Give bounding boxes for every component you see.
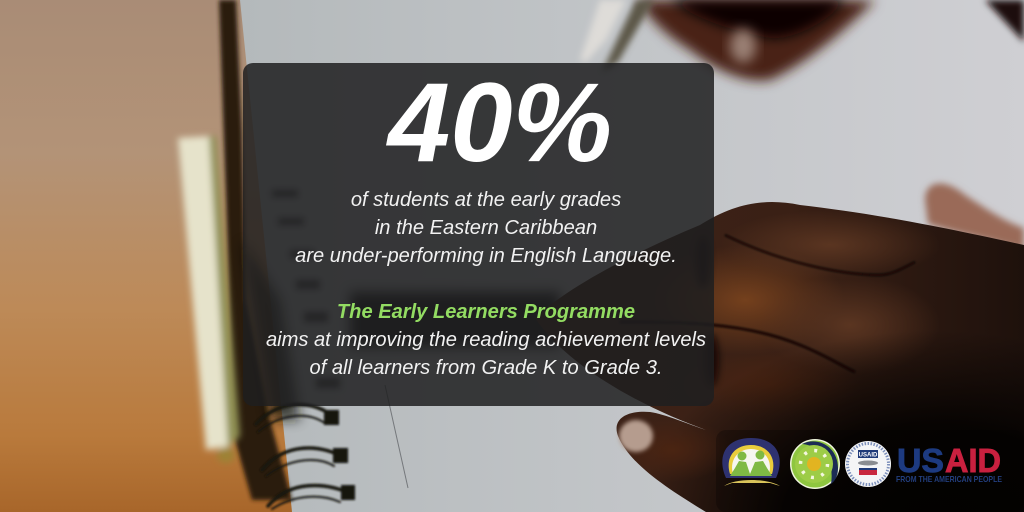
programme description: The Early Learners Programme [337, 301, 635, 323]
statement about under-performing students: of students at the early grades [351, 189, 621, 211]
logo: USAID seal: USAID [859, 452, 878, 458]
logo: USAID wordmark: FROM THE AMERICAN PEOPLE [896, 474, 1002, 484]
spiral binding shadow [219, 0, 292, 500]
logo: green sun emblem [790, 439, 840, 489]
logo: USAID wordmark [896, 443, 1002, 484]
logo: USAID wordmark: US [897, 443, 944, 480]
dark translucent text panel [243, 63, 714, 406]
finger creases [620, 235, 915, 372]
dark inner shade beside binding [242, 240, 300, 420]
programme description: aims at improving the reading achievement levels [266, 329, 706, 351]
statement about under-performing students: in the Eastern Caribbean [375, 217, 597, 239]
blurred pencil on desk [178, 136, 240, 463]
notebook page [240, 0, 1024, 512]
distant finger behind hand [925, 184, 1024, 250]
logo: USAID seal [845, 441, 891, 487]
programme description [266, 301, 706, 379]
upper hand holding pencil [640, 0, 1024, 81]
wooden desk [0, 0, 300, 512]
pencil tip [580, 0, 654, 72]
statement about under-performing students [295, 189, 677, 267]
shadow of blurred finger inside panel [350, 292, 560, 347]
logo: Early Learners Programme [722, 438, 780, 486]
writing hand [554, 202, 1024, 512]
logo: USAID wordmark: AID [945, 443, 1001, 480]
statement about under-performing students: are under-performing in English Language. [295, 245, 677, 267]
knuckle shadows [696, 236, 719, 386]
soft dark panel behind logos [716, 430, 1024, 512]
spiral rings [256, 404, 355, 509]
blurred spiral ticks [272, 190, 340, 388]
programme description: of all learners from Grade K to Grade 3. [310, 357, 662, 379]
big statistic 40%: 40% [388, 60, 612, 185]
fingernail [619, 420, 653, 452]
pencil line on page [385, 385, 408, 488]
